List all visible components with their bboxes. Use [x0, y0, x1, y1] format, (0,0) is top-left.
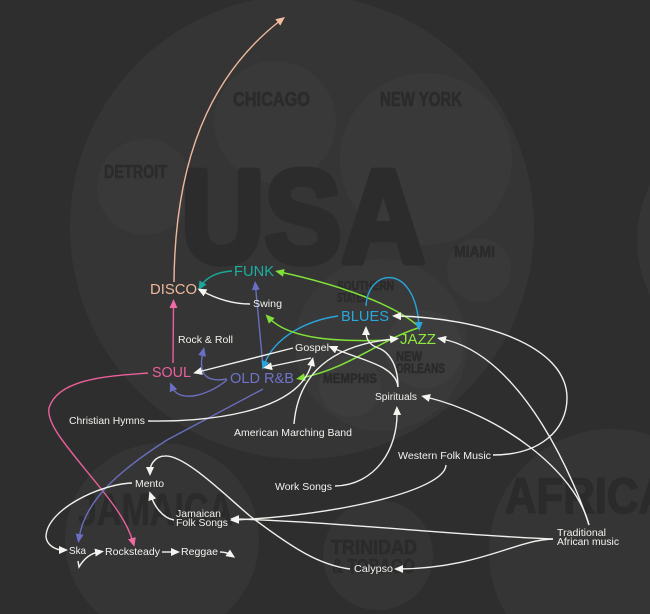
- arrow: Soul to Rocksteady: [49, 373, 148, 542]
- label: Blues: BLUES: [341, 308, 389, 325]
- arrow: Jazz to Swing: [269, 318, 392, 341]
- region: Trinidad and Tobago: & TOBAGO: [332, 556, 415, 578]
- arrow: Jamaican Folk Songs to Mento: [151, 496, 174, 520]
- arrow: Spirituals to Gospel: [333, 348, 398, 387]
- label: Traditional African music: African music: [557, 536, 619, 548]
- arrow: Traditional African music to Jazz: [442, 339, 589, 525]
- arrow: Reggae onward: [220, 552, 231, 555]
- region: USA: SOUTHERN: [337, 278, 394, 293]
- arrow: Blues to Jazz: [366, 278, 419, 326]
- label: Work Songs: Work Songs: [275, 481, 332, 493]
- label: Jamaican Folk Songs: Jamaican: [176, 508, 221, 520]
- label: Traditional African music: [557, 527, 619, 548]
- arrow: Spirituals to Blues: [366, 331, 398, 387]
- region: USA: MEMPHIS: [323, 371, 377, 386]
- region: USA: DETROIT: [104, 162, 167, 182]
- label: Calypso: Calypso: [354, 563, 393, 575]
- region: USA: CHICAGO: [233, 89, 310, 111]
- label: American Marching Band: American Marching Band: [234, 427, 352, 439]
- region: USA: STATES: [337, 290, 367, 305]
- arrow: Funk to Disco: [201, 271, 232, 286]
- arrow: Old R&B to Ska: [79, 389, 263, 538]
- arrow: Swing to Disco: [202, 291, 250, 304]
- arrow: Blues to Old R&B: [264, 316, 338, 365]
- label: Western Folk Music: Western Folk Music: [398, 450, 491, 462]
- arrow: Disco to outside: [174, 20, 281, 282]
- label: Jamaican Folk Songs: [176, 508, 228, 529]
- arrow: Jazz to Funk: [280, 272, 418, 326]
- arrow: Gospel to Soul: [198, 348, 293, 372]
- region: USA: ORLEANS: [396, 361, 445, 376]
- arrows: [46, 20, 589, 569]
- label: Rocksteady: Rocksteady: [105, 546, 161, 558]
- region: USA: USA: [181, 143, 425, 290]
- region: Africa: [489, 429, 650, 614]
- arrow: Ska to Rocksteady: [78, 552, 99, 567]
- label: Old R&B: OLD R&B: [230, 370, 294, 387]
- arrow: Old R&B to Rock and Roll: [201, 352, 227, 380]
- label: Reggae: Reggae: [181, 546, 218, 558]
- label: Jazz: JAZZ: [400, 331, 436, 348]
- region: Europe edge: [637, 185, 650, 295]
- arrow: Western Folk Music to Blues: [397, 316, 567, 455]
- region: USA: NEW: [396, 349, 422, 364]
- label: Christian Hymns: Christian Hymns: [69, 415, 145, 427]
- region: Trinidad and Tobago: [323, 500, 433, 610]
- region: Jamaica: [65, 443, 259, 614]
- region: Trinidad and Tobago: TRINIDAD: [331, 537, 417, 559]
- arrow: Work Songs to Spirituals: [335, 411, 397, 486]
- arrow: Rocksteady to Reggae: [162, 551, 175, 553]
- region: USA: [70, 0, 534, 459]
- arrow: Traditional African music to Calypso: [399, 539, 553, 569]
- arrow: Traditional African music to Spirituals: [426, 397, 589, 525]
- arrow: Traditional African music to Jamaican Folk Songs: [235, 519, 553, 539]
- region: USA: MIAMI: [454, 244, 495, 261]
- arrow: Old R&B to Funk: [256, 286, 263, 367]
- label: Ska: Ska: [69, 545, 86, 557]
- arrow: Christian Hymns to Gospel: [148, 362, 312, 421]
- arrow: Calypso to Mento: [150, 456, 350, 569]
- arrow: American Marching Band to Jazz: [294, 339, 394, 424]
- label: Rock and Roll: Rock & Roll: [178, 334, 233, 346]
- label: Gospel: Gospel: [295, 342, 329, 354]
- label: Funk: FUNK: [234, 263, 274, 280]
- label: Mento: Mento: [135, 478, 164, 490]
- region: USA: NEW YORK: [380, 89, 462, 111]
- genre labels: [69, 263, 619, 575]
- arrow: Western Folk Music to Jamaican Folk Songs: [235, 465, 446, 520]
- label: Spirituals: Spirituals: [375, 391, 417, 403]
- label: Jamaican Folk Songs: Folk Songs: [176, 517, 228, 529]
- arrow: Soul to Disco: [172, 304, 174, 363]
- label: Swing: Swing: [253, 298, 282, 310]
- label: Disco: DISCO: [150, 281, 197, 298]
- arrow: Old R&B to Soul: [172, 380, 227, 396]
- arrow: Mento to Ska: [46, 483, 132, 550]
- label: Soul: SOUL: [152, 364, 191, 381]
- arrow: Gospel to Old R&B: [268, 358, 311, 367]
- label: Traditional African music: Traditional: [557, 527, 606, 539]
- region: Jamaica: JAMAICA: [78, 484, 233, 535]
- arrow: Jazz to Old R&B: [301, 328, 418, 378]
